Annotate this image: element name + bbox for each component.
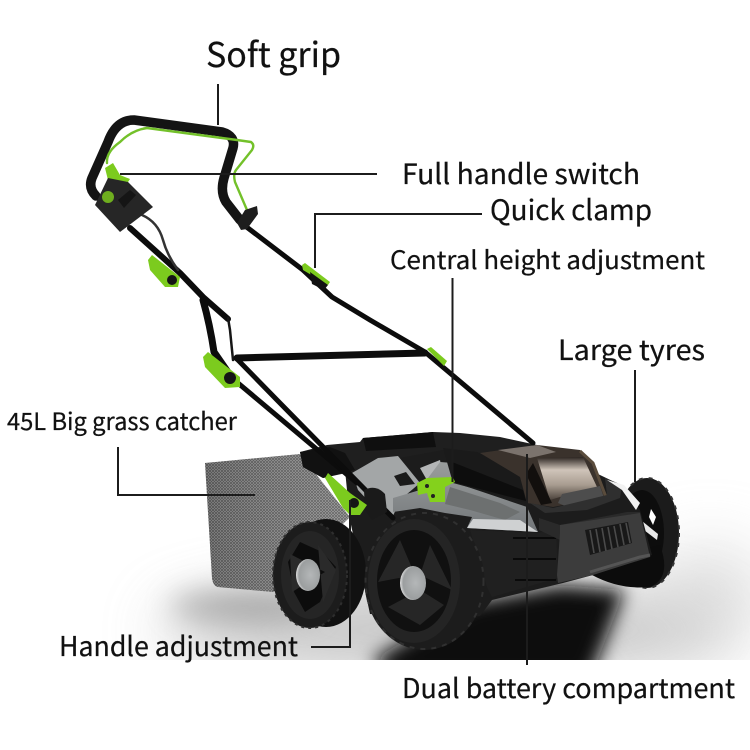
green height clamp lower [203, 352, 240, 388]
cover window [537, 457, 597, 500]
small wheel hub [296, 559, 320, 591]
power cable [142, 215, 178, 270]
handle bracket [237, 206, 258, 230]
switch box [95, 163, 153, 232]
battery compartment block [443, 448, 527, 503]
mower main body [300, 432, 652, 616]
large front wheel [364, 512, 484, 650]
quick clamp lever [302, 263, 330, 290]
handle frame [91, 120, 533, 518]
lower twin tubes [232, 378, 357, 483]
green switch wire [107, 128, 253, 210]
grass catcher mesh bag [205, 454, 350, 592]
silver centre pieces [352, 456, 420, 516]
rear corner wedge [300, 447, 355, 478]
label: full handle switch: Full handle switch [402, 153, 640, 193]
label: large tyres: Large tyres [558, 329, 705, 369]
deck [393, 462, 538, 532]
central height lever [417, 477, 455, 502]
top grip bar [91, 120, 240, 220]
bottom handle clip [325, 473, 387, 520]
front bumper [530, 478, 622, 513]
label: dual battery compartment: Dual battery compartment [402, 667, 735, 706]
battery lid [363, 432, 436, 451]
left upper arm [130, 228, 228, 319]
label: big grass catcher: 45L Big grass catcher [7, 402, 238, 437]
body side panel [470, 530, 558, 597]
right arm [240, 222, 533, 443]
smoked battery cover [480, 445, 605, 507]
small front wheel [273, 519, 366, 628]
left lower arm [203, 300, 232, 378]
front grille [585, 522, 632, 555]
thin rod [228, 318, 233, 360]
label: handle adjustment: Handle adjustment [59, 625, 298, 664]
cross bar [237, 353, 425, 358]
rear black hood [300, 432, 537, 478]
mower rear wheel right [592, 478, 679, 588]
callout lines [118, 84, 635, 665]
right arm clamp [427, 347, 447, 366]
body underlay [345, 445, 652, 616]
green height clamp upper [148, 255, 180, 287]
large wheel hub [400, 566, 426, 600]
label: central height adjustment: Central height adjustment [390, 241, 706, 277]
ground shadow [160, 545, 750, 680]
label: quick clamp: Quick clamp [490, 189, 652, 229]
label: soft grip: Soft grip [206, 28, 341, 77]
